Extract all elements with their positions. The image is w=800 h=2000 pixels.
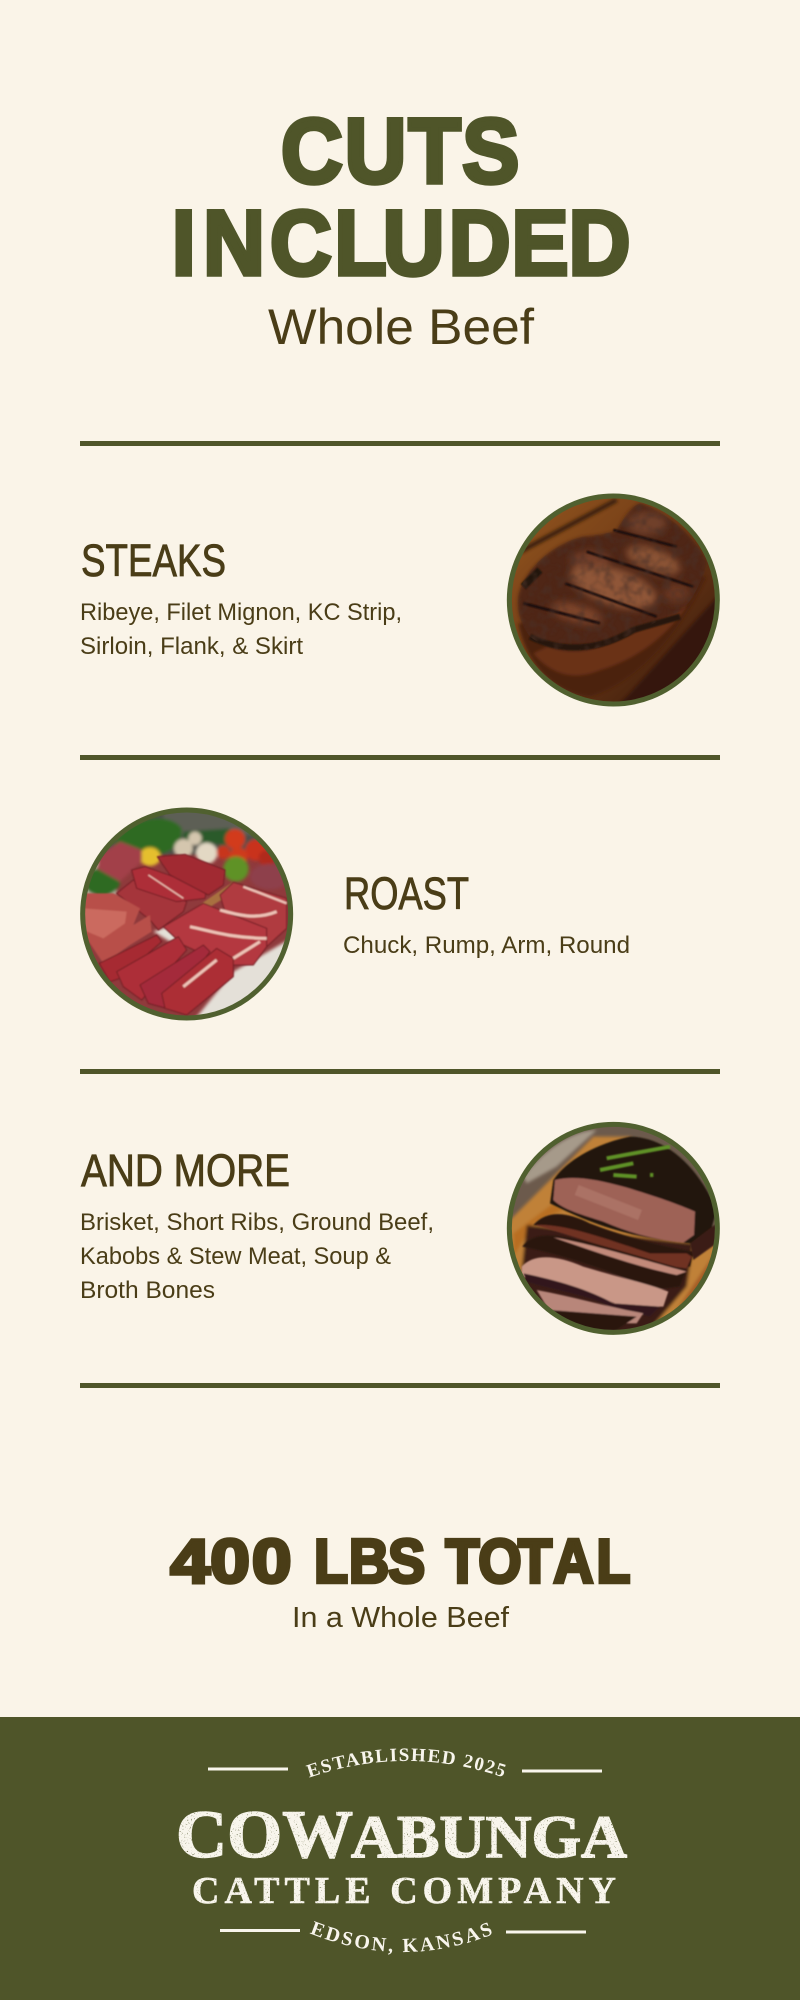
divider 1 (80, 441, 720, 446)
total: 400 lbs (170, 1528, 630, 1596)
section: and more (80, 1120, 723, 1340)
heading: roast: ROAST (344, 868, 469, 919)
section: steaks (80, 490, 723, 710)
photo ring (509, 1124, 717, 1332)
and more description: Brisket, Short Ribs, Ground Beef, (80, 1209, 434, 1236)
photo: raw beef cuts (77, 805, 297, 1025)
logo rules (208, 1768, 602, 1934)
and more description: Broth Bones (80, 1277, 215, 1304)
cowabunga wordmark: ABUNGA (351, 1804, 627, 1870)
logo: cowabunga cattle company (176, 1748, 628, 1955)
total caption: In a Whole Beef (292, 1602, 510, 1634)
title: cuts included: CUTS (281, 100, 519, 202)
divider 3 (80, 1069, 720, 1074)
cowabunga wordmark (176, 1796, 627, 1872)
section: roast (77, 805, 630, 1025)
footer band (0, 1717, 800, 2000)
photo: grilled steak (503, 490, 723, 710)
photo ring (509, 496, 717, 704)
cattle company wordmark: CATTLE COMPANY (192, 1870, 616, 1912)
photo: sliced brisket (503, 1120, 723, 1340)
divider 2 (80, 755, 720, 760)
heading: and more: AND MORE (81, 1145, 290, 1196)
divider 4 (80, 1383, 720, 1388)
roast description: Chuck, Rump, Arm, Round (343, 932, 630, 959)
photo ring (83, 810, 291, 1018)
steaks description: Ribeye, Filet Mignon, KC Strip, (80, 599, 402, 626)
subtitle: whole beef: Whole Beef (268, 299, 534, 355)
cowabunga wordmark: COW (176, 1796, 353, 1872)
and more description: Kabobs & Stew Meat, Soup & (80, 1243, 391, 1270)
title: cuts included: INCLUDED (172, 192, 630, 294)
total: 400 lbs: 400 (170, 1528, 292, 1596)
total: 400 lbs: LBS TOTAL (314, 1528, 630, 1596)
heading: steaks: STEAKS (81, 535, 226, 586)
and more description (80, 1209, 434, 1304)
location arc text: EDSON, KANSAS (310, 1921, 492, 1955)
steaks description: Sirloin, Flank, & Skirt (80, 633, 303, 660)
steaks description (80, 599, 402, 660)
established arc text: ESTABLISHED 2025 (306, 1748, 506, 1778)
title: cuts included (172, 100, 630, 294)
